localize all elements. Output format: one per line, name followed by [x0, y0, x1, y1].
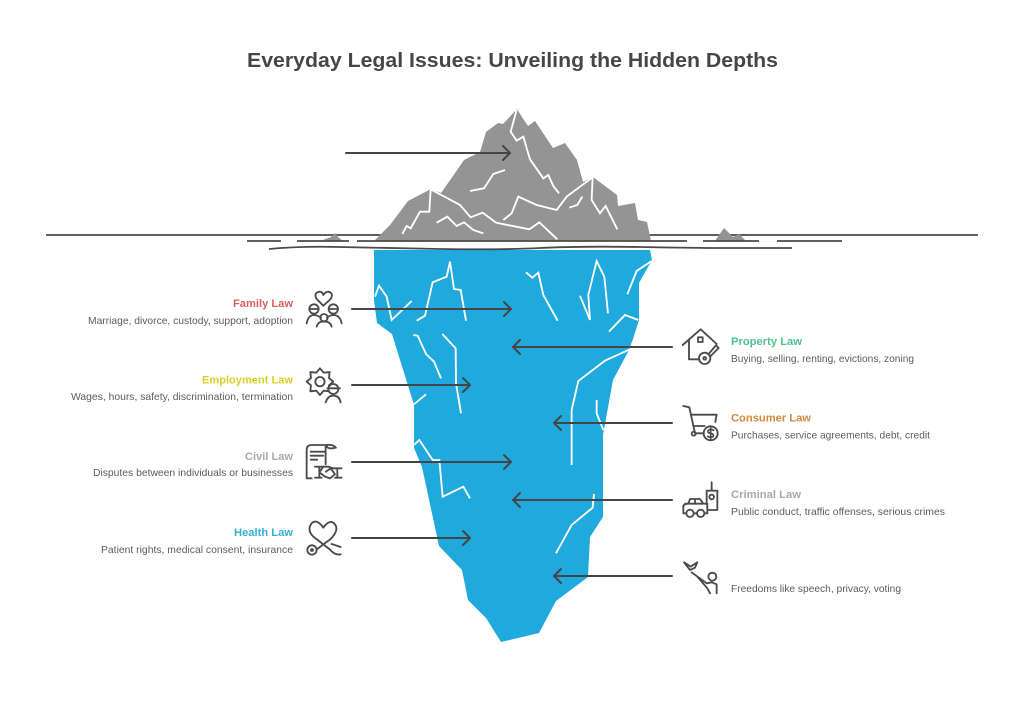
panel: employment law: Wages, hours, safety, discrimination, termination	[71, 391, 293, 403]
icon: gear and worker	[307, 368, 341, 402]
panel: consumer law	[683, 406, 930, 442]
panel: property law: Property Law	[731, 336, 802, 348]
icon: family with heart	[307, 292, 342, 327]
panel: employment law	[71, 368, 341, 403]
panel: health law: Patient rights, medical consent, insurance	[101, 544, 293, 556]
panel: family law	[88, 292, 342, 327]
arrow: criminal law	[513, 493, 672, 507]
panel: civil rights: Freedoms like speech, privacy, voting	[731, 583, 901, 595]
panel: employment law: Employment Law	[202, 374, 293, 386]
panel: civil law: Disputes between individuals or businesses	[93, 467, 293, 479]
arrow: family law	[352, 302, 511, 316]
icon: contract and handshake	[307, 445, 342, 478]
small ice peak right	[715, 228, 746, 241]
panel: family law: Family Law	[233, 298, 293, 310]
panel: family law: Marriage, divorce, custody, support, adoption	[88, 315, 293, 327]
panel: criminal law: Criminal Law	[731, 489, 801, 501]
panel: criminal law: Public conduct, traffic offenses, serious crimes	[731, 506, 945, 518]
shoreline strokes	[247, 241, 842, 249]
iceberg above water	[375, 109, 651, 241]
panel: property law	[683, 329, 914, 365]
icon: cart with dollar	[683, 406, 718, 440]
panel: civil law: Civil Law	[245, 451, 293, 463]
arrow: civil rights	[554, 569, 672, 583]
icon: person releasing dove	[684, 562, 717, 593]
panel: civil law	[93, 445, 342, 479]
arrow: civil law	[352, 455, 511, 469]
panel: consumer law: Purchases, service agreements, debt, credit	[731, 430, 930, 442]
icon: house and key	[683, 329, 719, 364]
icon: car and radio	[683, 482, 717, 517]
panel: health law	[101, 522, 341, 556]
arrow: consumer law	[554, 416, 672, 430]
arrow: employment law	[352, 378, 470, 392]
arrow: tip of iceberg	[346, 146, 510, 160]
waterline	[46, 234, 978, 236]
icon: stethoscope heart	[307, 522, 341, 555]
panel: property law: Buying, selling, renting, evictions, zoning	[731, 353, 914, 365]
arrow: property law	[513, 340, 672, 354]
panel: health law: Health Law	[234, 527, 293, 539]
panel: criminal law	[683, 482, 945, 518]
iceberg below water	[374, 250, 652, 642]
title: Everyday Legal Issues: Unveiling the Hidden Depths	[247, 50, 778, 72]
panel: consumer law: Consumer Law	[731, 412, 811, 424]
panel: civil rights	[684, 562, 901, 595]
small ice peak left	[320, 233, 343, 241]
arrow: health law	[352, 531, 470, 545]
